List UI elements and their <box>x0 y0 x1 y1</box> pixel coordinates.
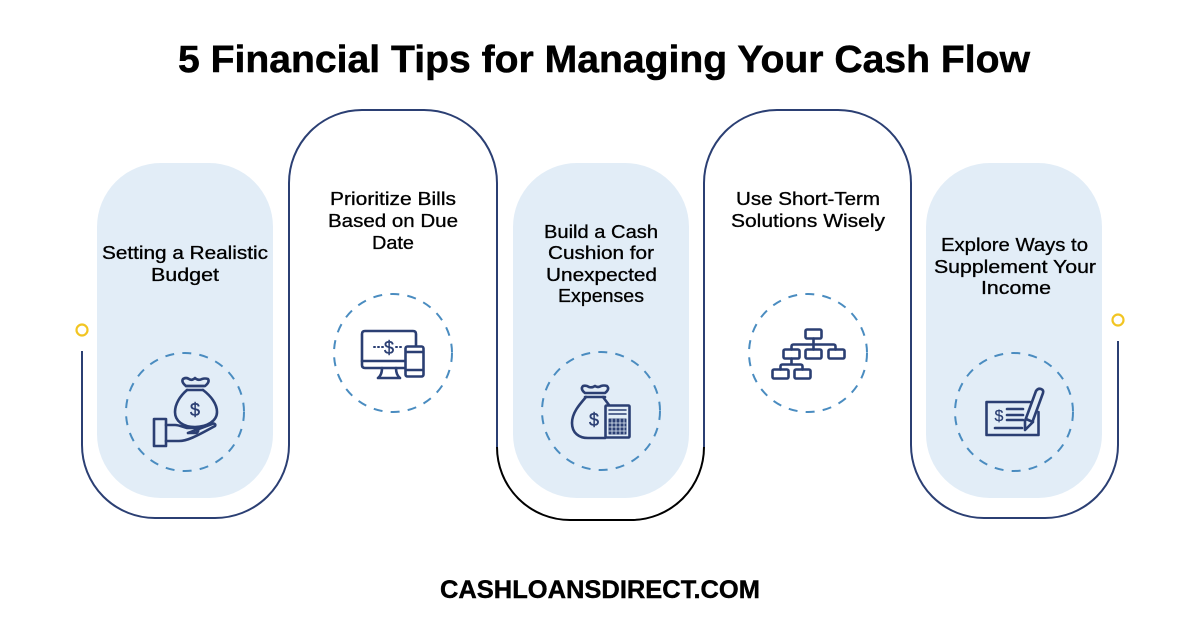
icon: cheque and pen <box>986 389 1043 435</box>
marker: left start <box>76 324 88 336</box>
icon: cheque and pen: $ <box>994 408 1004 425</box>
step 5 heading: Supplement Your <box>934 257 1096 277</box>
step 3 heading: Cushion for <box>548 243 654 263</box>
step 4 heading: Solutions Wisely <box>731 211 885 231</box>
step 3 heading: Build a Cash <box>544 222 658 242</box>
step 3 heading: Unexpected <box>546 265 657 285</box>
step 4 dashed ring <box>749 294 867 412</box>
marker: right end <box>1112 314 1124 326</box>
step 2 heading: Based on Due <box>328 211 458 231</box>
step 5 heading: Explore Ways to <box>941 235 1088 255</box>
step 3 dashed ring <box>542 352 660 470</box>
connector line: black curve <box>497 447 704 520</box>
step 5 heading <box>934 235 1096 298</box>
icon: monitor and phone <box>362 331 424 378</box>
step 2 dashed ring <box>334 294 452 412</box>
title: 5 Financial Tips for Managing Your Cash Flow <box>178 39 1030 81</box>
step 1 heading: Setting a Realistic <box>102 243 268 263</box>
step 5 heading: Income <box>981 278 1051 298</box>
panel: step 2 <box>328 189 458 412</box>
step 3 heading <box>544 222 658 306</box>
step 1 heading: Budget <box>151 265 219 285</box>
panel: step 3 <box>513 163 689 498</box>
panel: step 5 <box>926 163 1102 498</box>
step 3 heading: Expenses <box>558 286 644 306</box>
icon: hand holding money bag <box>154 378 217 446</box>
icon: monitor and phone: $ <box>384 338 394 358</box>
panel: step 1 <box>97 163 273 498</box>
step 2 heading: Date <box>372 233 414 253</box>
icon: hand holding money bag: $ <box>190 400 200 420</box>
icon: money bag and calculator: $ <box>589 410 599 430</box>
footer website: CASHLOANSDIRECT.COM <box>440 576 760 604</box>
step 5 dashed ring <box>955 353 1073 471</box>
icon: money bag and calculator <box>572 386 630 438</box>
panel: step 4 <box>731 189 885 412</box>
step 2 heading <box>328 189 458 253</box>
step 4 heading <box>731 189 885 231</box>
step 4 heading: Use Short-Term <box>736 189 880 209</box>
step 2 heading: Prioritize Bills <box>330 189 456 209</box>
step 1 dashed ring <box>126 353 244 471</box>
step 1 heading <box>102 243 268 285</box>
icon: hierarchy chart <box>772 330 844 378</box>
connector line <box>82 110 1118 518</box>
